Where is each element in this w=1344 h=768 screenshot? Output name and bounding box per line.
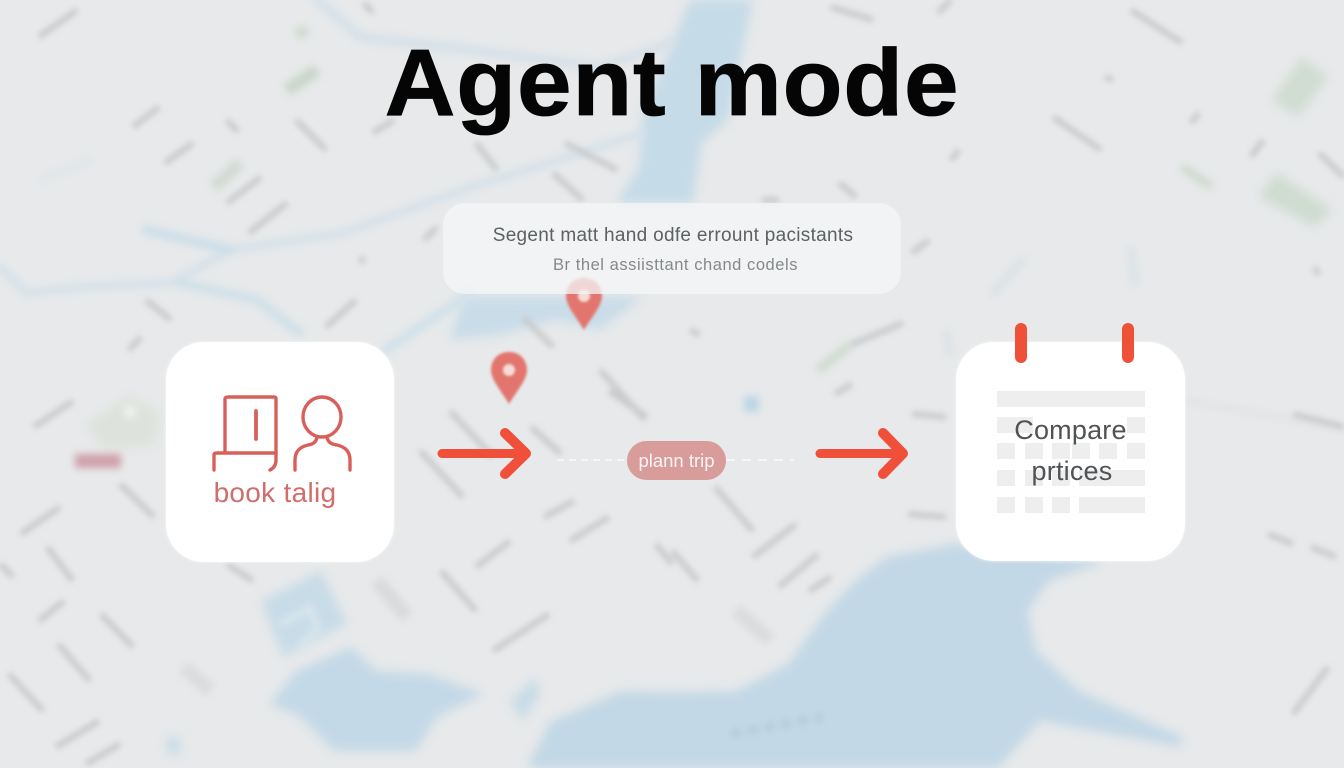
pill: plan trip: [627, 441, 726, 480]
top-right streets: [831, 7, 873, 20]
arrow: right: [816, 428, 908, 479]
calendar label: Compare: [1014, 415, 1127, 445]
right streets: [1293, 414, 1344, 427]
calendar grid: [997, 391, 1145, 513]
middle streets: [450, 411, 493, 457]
card label: book talig: [214, 477, 336, 508]
callout line 1: Segent matt hand odfe errount pacistants: [493, 225, 853, 246]
pill: plan trip: plann trip: [638, 450, 715, 471]
water: [617, 0, 753, 203]
arrow: left: [438, 428, 531, 479]
title: Agent mode: [385, 30, 959, 136]
top-left streets: [39, 10, 77, 37]
icon: book and person: [212, 395, 352, 472]
left streets: [34, 401, 73, 427]
faint blocks: [377, 581, 407, 617]
map pin: lower: [489, 350, 529, 405]
calendar label second line: prtices: [1032, 456, 1112, 486]
info callout: [443, 203, 901, 294]
calendar binding rings: [1015, 323, 1134, 363]
card: calendar compare prices: [956, 342, 1185, 561]
map pin: upper: [564, 278, 604, 331]
parks: [1272, 57, 1328, 117]
callout line 2: Br thel assiisttant chand codels: [553, 256, 798, 274]
card: book and person: [166, 342, 394, 562]
dashed connector: right: [726, 459, 794, 461]
dashed connector: left: [557, 459, 624, 461]
